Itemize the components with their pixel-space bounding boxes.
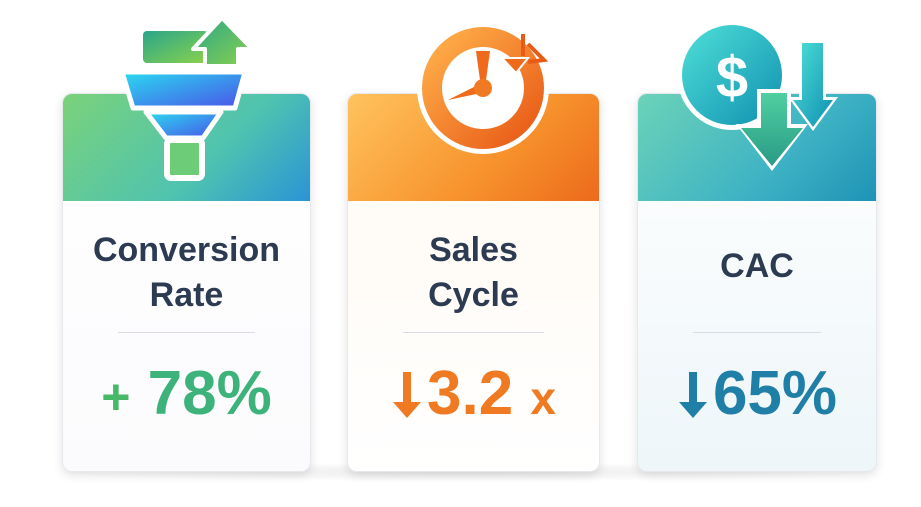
heading <box>428 231 519 314</box>
header band orange <box>348 94 599 201</box>
floor shadow <box>40 462 890 482</box>
icon: clock <box>417 22 549 154</box>
value: + 78% <box>101 359 272 428</box>
value: 3.2 x <box>427 359 556 428</box>
heading: Cycle <box>428 276 519 314</box>
value: 65% <box>713 359 837 428</box>
panel: conversion rate <box>62 93 311 472</box>
heading: Rate <box>150 276 223 314</box>
header band teal <box>638 94 876 201</box>
icon: funnel <box>122 18 252 178</box>
icon: dollar with down arrows <box>677 20 838 171</box>
panel: CAC <box>637 93 877 472</box>
heading: CAC <box>720 247 794 285</box>
heading <box>93 231 280 314</box>
header band green <box>63 94 310 201</box>
heading: Sales <box>429 231 518 269</box>
panel: sales cycle <box>347 93 600 472</box>
icon: dollar with down arrows: $ <box>716 45 748 110</box>
heading: Conversion <box>93 231 280 269</box>
